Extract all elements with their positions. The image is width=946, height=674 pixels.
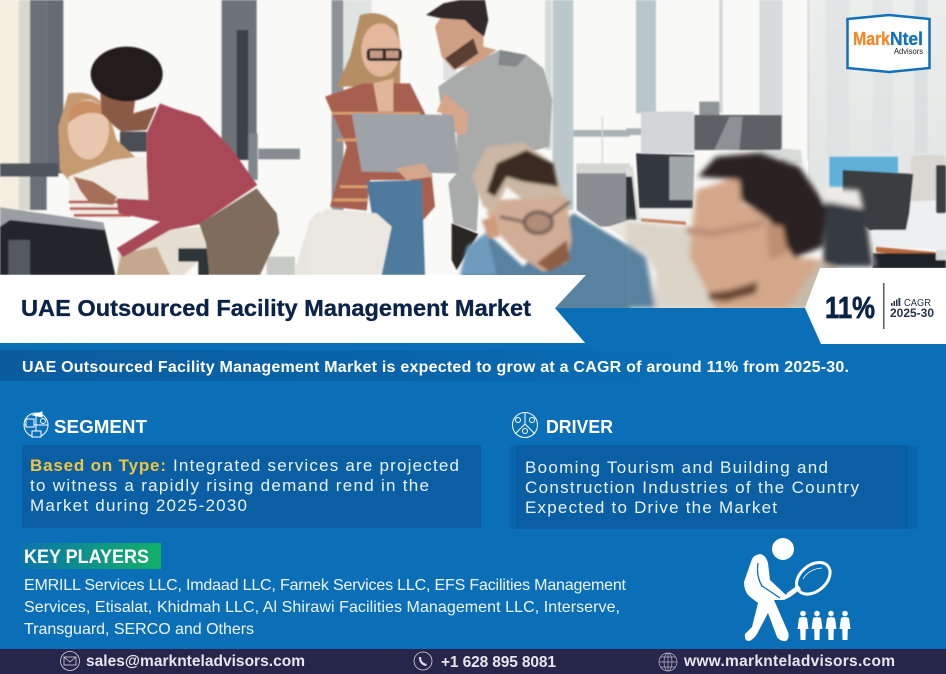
right background xyxy=(626,0,946,268)
key players heading: KEY PLAYERS xyxy=(24,547,149,568)
woman in maroon xyxy=(117,103,257,257)
title: UAE Outsourced Facility Management Market xyxy=(21,295,531,321)
CAGR period: 2025-30 xyxy=(890,308,934,320)
CAGR label: CAGR xyxy=(904,297,931,309)
key players list xyxy=(24,577,627,638)
driver text: Construction Industries of the Country xyxy=(525,478,860,497)
icon: segment globe xyxy=(24,412,48,437)
icon: small bar chart xyxy=(891,298,900,306)
photo: office team xyxy=(0,0,946,310)
front man with glasses xyxy=(458,143,630,310)
segment text: Market during 2025-2030 xyxy=(30,496,247,515)
monitor xyxy=(0,207,115,275)
icon: email xyxy=(60,652,80,670)
centre people xyxy=(310,0,630,275)
icon: phone xyxy=(414,652,432,670)
driver text: Booming Tourism and Building and xyxy=(525,458,828,477)
blonde woman xyxy=(58,93,137,190)
icon: driver globe xyxy=(512,412,538,438)
woman with laptop xyxy=(336,12,402,88)
small people xyxy=(798,611,850,640)
heading: segment: SEGMENT xyxy=(54,416,148,437)
CAGR value: 11% xyxy=(825,290,875,325)
blue ribbon xyxy=(555,308,822,344)
key players list: Transguard, SERCO and Others xyxy=(24,621,254,638)
title banner xyxy=(0,275,586,343)
segment text: Integrated services are projected xyxy=(173,456,459,475)
CAGR badge xyxy=(805,268,946,344)
summary strip xyxy=(0,350,849,381)
segment text: Based on Type: xyxy=(30,456,166,475)
driver text xyxy=(525,458,860,517)
laptop xyxy=(352,113,459,173)
summary strip: UAE Outsourced Facility Management Market is expected to grow at a CAGR of around 11% from 2025-30. xyxy=(22,359,849,376)
driver text: Expected to Drive the Market xyxy=(525,498,777,517)
key players list: EMRILL Services LLC, Imdaad LLC, Farnek Services LLC, EFS Facilities Management xyxy=(24,577,627,594)
website: www.marknteladvisors.com xyxy=(683,653,895,670)
front man in profile xyxy=(626,153,876,310)
heading: driver: DRIVER xyxy=(546,416,613,437)
segment text xyxy=(30,456,459,515)
footer bar xyxy=(0,649,946,674)
key players list: Services, Etisalat, Khidmah LLC, Al Shirawi Facilities Management LLC, Interserve, xyxy=(24,599,620,616)
man in grey sweater xyxy=(438,50,552,232)
email: sales@marknteladvisors.com xyxy=(86,653,305,670)
logo: MarkNtel Advisors: Advisors xyxy=(894,47,923,56)
phone number: +1 628 895 8081 xyxy=(441,654,556,671)
panel: segment xyxy=(22,445,481,528)
grey chair background xyxy=(576,172,630,228)
segment text: to witness a rapidly rising demand rend in the xyxy=(30,476,429,495)
chair lower right xyxy=(293,210,320,275)
left window frames xyxy=(0,0,320,275)
logo: MarkNtel Advisors xyxy=(848,15,930,72)
panel: driver xyxy=(509,445,918,529)
white chair xyxy=(310,209,392,275)
icon: web globe xyxy=(659,653,677,671)
logo: MarkNtel Advisors: Mark xyxy=(853,29,891,49)
icon: person with magnifier and small people xyxy=(744,538,850,641)
logo: MarkNtel Advisors: Ntel xyxy=(890,29,923,49)
